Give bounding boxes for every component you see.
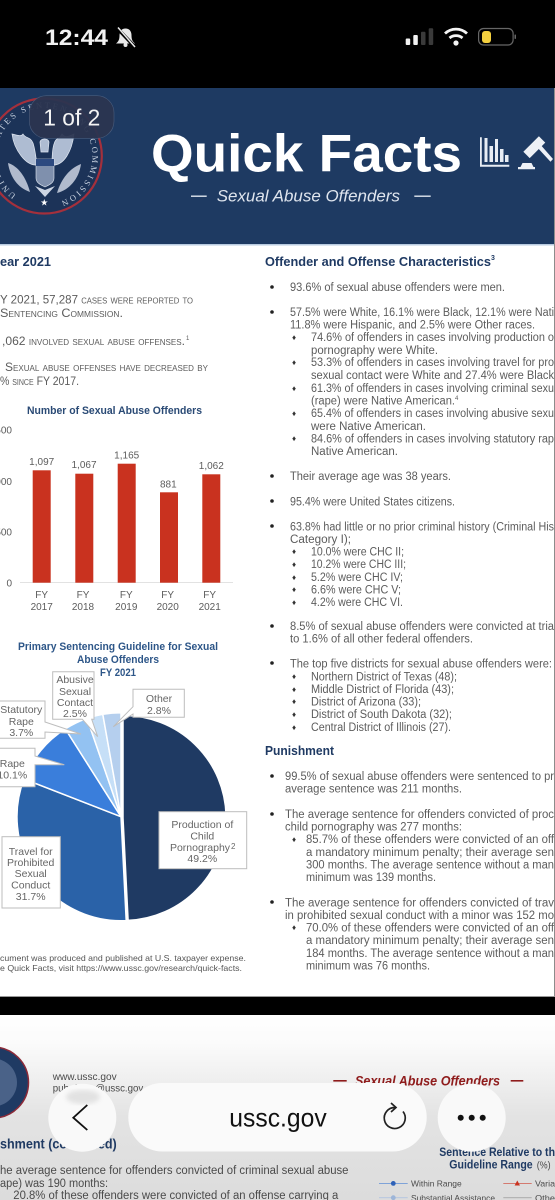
callout: travel (2, 837, 60, 908)
x axis labels: 2019 (115, 602, 138, 613)
text: characteristics list: District of South Dakota (32); (311, 709, 452, 721)
header band (0, 88, 554, 246)
text: case totals: Sexual abuse offenses have decreased by (5, 360, 209, 374)
text: characteristics list: 4 (455, 396, 459, 402)
text: characteristics list: to 1.6% of all other federal offenders. (290, 634, 473, 646)
panel: punishment (265, 743, 555, 972)
text: characteristics list: 6.6% were CHC V; (311, 584, 401, 596)
page counter pill (29, 96, 114, 138)
title: Quick Facts (151, 125, 462, 184)
text: continued punishment: he average sentence for offenders convicted of criminal sexual abuse (0, 1165, 348, 1177)
heading: Offender and Offense Characteristics (265, 254, 491, 269)
callout: abusive sexual contact (53, 672, 98, 737)
callout: statutory rape: Statutory (0, 704, 43, 716)
text: characteristics list: Central District of Illinois (27). (311, 722, 451, 734)
x axis labels: 2020 (157, 602, 179, 613)
callout: production: Pornography (170, 842, 231, 854)
diamond markers: ♦ (292, 358, 296, 367)
callout: production: Production of (171, 819, 233, 831)
callout: abusive sexual contact: Abusive (56, 674, 94, 686)
text: characteristics list: Native American. (311, 446, 398, 458)
x axis labels: FY (161, 590, 174, 601)
callout: travel: Prohibited (7, 857, 55, 869)
callout: other (113, 689, 184, 727)
diamond markers: ♦ (292, 672, 296, 681)
callout: abusive sexual contact: Contact (57, 697, 93, 709)
text: punishment list: minimum was 76 months. (306, 960, 430, 972)
text: case totals: Y 2021, 57,287 cases were reported to (0, 292, 193, 306)
diamond markers: ♦ (292, 409, 296, 418)
legend: Within Range (411, 1179, 462, 1189)
small seal (0, 1047, 28, 1118)
callout: statutory rape (0, 701, 81, 739)
diamond markers: ♦ (292, 333, 296, 342)
callout: other: 2.8% (147, 705, 171, 717)
text: characteristics list: 10.2% were CHC III; (311, 559, 406, 571)
panel: offender and offense characteristics (265, 254, 555, 734)
text: punishment list: minimum was 139 months. (306, 872, 436, 884)
icon: battery (479, 28, 516, 45)
diamond markers: ♦ (292, 598, 296, 607)
legend (379, 1179, 555, 1200)
second page subtitle: Sexual Abuse Offenders (355, 1072, 500, 1088)
heading: fiscal year: ear 2021 (0, 254, 51, 269)
callout: production: 49.2% (187, 853, 217, 865)
chart title: sentence relative to guideline: (%) (537, 1160, 551, 1172)
text: punishment list: child pornography was 277 months: (285, 822, 462, 834)
x axis labels: 2017 (31, 602, 53, 613)
diamond markers: ♦ (292, 547, 296, 556)
text: continued punishment: ape) was 190 months: (0, 1178, 108, 1190)
text: punishment list: The average sentence for offenders convicted of proc (285, 809, 554, 821)
diamond markers: ♦ (292, 723, 296, 732)
diamond markers: ♦ (292, 560, 296, 569)
text: characteristics list: Category I); (290, 534, 351, 546)
text: characteristics list: District of Arizona (33); (311, 696, 421, 708)
chart title (18, 641, 218, 679)
text: characteristics list: pornography were White. (311, 345, 438, 357)
bar values: 1,097 (29, 457, 55, 468)
contact text (52, 1071, 144, 1095)
pie slices (17, 713, 226, 921)
address pill: ussc.gov (229, 1103, 327, 1133)
heading: Punishment (265, 743, 335, 758)
text: characteristics list: Middle District of Florida (43); (311, 684, 454, 696)
diamond markers: ♦ (292, 573, 296, 582)
text: case totals (0, 292, 209, 388)
icon: reload (384, 1103, 405, 1128)
text: characteristics list: 5.2% were CHC IV; (311, 572, 403, 584)
footnote: cument was produced and published at U.S. taxpayer expense. (0, 953, 246, 963)
diamond markers: ♦ (292, 697, 296, 706)
text: characteristics list: 10.0% were CHC II; (311, 546, 404, 558)
panel: left column intro (0, 254, 209, 388)
callout: other: Other (146, 693, 173, 705)
more button (438, 1084, 506, 1152)
text: punishment list: average sentence was 211 months. (285, 784, 462, 796)
status time: 12:44 (45, 25, 109, 50)
text: punishment list: 70.0% of these offenders were convicted of an off (306, 922, 555, 934)
text: characteristics list (290, 282, 555, 734)
text: punishment list: 85.7% of these offenders were convicted of an off (306, 834, 555, 846)
footnote: e Quick Facts, visit https://www.ussc.gov/research/quick-facts. (0, 963, 242, 973)
heading: punishment continued: shment (continued) (0, 1135, 117, 1151)
chart title: Number of Sexual Abuse Offenders (27, 405, 202, 417)
diamond markers: ♦ (292, 384, 296, 393)
text: characteristics list: 93.6% of sexual abuse offenders were men. (290, 282, 505, 294)
eagle shield (36, 159, 54, 187)
callout: production (159, 812, 247, 869)
text: characteristics list: Northern District of Texas (48); (311, 672, 457, 684)
bar chart: number of offenders (0, 405, 233, 613)
x axis labels: FY (35, 590, 48, 601)
callout: rape: Rape (0, 758, 25, 770)
callout: abusive sexual contact: 2.5% (63, 708, 87, 720)
text: punishment list: The average sentence for offenders convicted of trav (285, 898, 554, 910)
x axis labels: FY (203, 590, 216, 601)
icon: wifi (445, 29, 467, 44)
callout: rape (0, 748, 64, 787)
bullet markers (270, 774, 274, 904)
eagle tail (35, 186, 55, 197)
callout: travel: Travel for (9, 846, 53, 858)
contact text: pubaffairs@ussc.gov (53, 1083, 144, 1095)
pie chart: primary sentencing guideline (0, 641, 247, 921)
callout: statutory rape: Rape (9, 716, 34, 728)
chart title: Abuse Offenders (77, 654, 159, 666)
text: punishment list: 300 months. The average sentence without a man (306, 860, 554, 872)
text: characteristics list: Their average age was 38 years. (290, 471, 451, 483)
y axis labels: 0 (6, 578, 12, 590)
text: characteristics list: 4.2% were CHC VI. (311, 597, 403, 609)
x axis labels (31, 590, 221, 613)
bar values: 1,062 (199, 461, 224, 472)
text: punishment list: a mandatory minimum penalty; their average sen (306, 847, 554, 859)
text: punishment list (285, 771, 555, 972)
chart title: Primary Sentencing Guideline for Sexual (18, 641, 218, 653)
page counter pill: 1 of 2 (43, 105, 100, 131)
text: case totals: ,062 involved sexual abuse offenses. (2, 334, 185, 348)
text: case totals: % since FY 2017. (0, 374, 79, 388)
olive branches (8, 163, 81, 193)
callout: travel: Sexual (15, 868, 47, 880)
diamond markers (292, 835, 296, 932)
second page preview (0, 1015, 555, 1200)
icon: silenced bell (116, 28, 135, 47)
address pill (128, 1083, 427, 1152)
y axis labels (0, 426, 12, 590)
text: punishment list: in prohibited sexual conduct with a minor was 152 mo (285, 910, 554, 922)
eagle wings (12, 134, 74, 165)
icon: signal bars (406, 28, 433, 45)
text: punishment list: 99.5% of sexual abuse offenders were sentenced to pr (285, 771, 554, 783)
icon: bar chart (480, 137, 509, 167)
x axis labels: FY (77, 590, 90, 601)
chart title: sentence relative to guideline (439, 1147, 555, 1172)
text: characteristics list: The top five districts for sexual abuse offenders were: (290, 658, 552, 670)
diamond markers (292, 333, 296, 732)
text: characteristics list: (rape) were Native American. (311, 396, 455, 408)
seal star: ★ (40, 198, 48, 208)
diamond markers: ♦ (292, 585, 296, 594)
callout: production: 2 (231, 842, 236, 851)
text: characteristics list: 11.8% were Hispanic, and 2.5% were Other races. (290, 320, 535, 332)
back button (48, 1084, 116, 1152)
icon: gavel (518, 136, 553, 169)
page gap divider (0, 996, 555, 1015)
legend: Varia (535, 1179, 555, 1189)
text: punishment list: 184 months. The average sentence without a man (306, 948, 554, 960)
text: case totals: Sentencing Commission. (0, 306, 123, 320)
callout: travel: Conduct (11, 880, 50, 892)
chart title: FY 2021 (100, 667, 136, 679)
browser toolbar (48, 1083, 506, 1152)
text: case totals: 1 (186, 336, 190, 342)
bullet markers (270, 285, 274, 665)
callout: statutory rape: 3.7% (9, 727, 33, 739)
x axis labels: FY (120, 590, 133, 601)
diamond markers: ♦ (292, 434, 296, 443)
diamond markers: ♦ (292, 923, 296, 932)
bar values: 881 (160, 480, 177, 490)
text: characteristics list: 95.4% were United States citizens. (290, 496, 455, 508)
contact text: www.ussc.gov (52, 1071, 117, 1083)
bar values: 1,165 (114, 450, 140, 462)
chart title: sentence relative to guideline: Guideline Range (449, 1160, 533, 1172)
diamond markers: ♦ (292, 835, 296, 844)
diamond markers: ♦ (292, 710, 296, 719)
heading: 3 (491, 255, 495, 262)
diamond markers: ♦ (292, 685, 296, 694)
footnote (0, 953, 246, 973)
bars (33, 464, 220, 583)
bar values (29, 450, 224, 490)
text: characteristics list: 8.5% of sexual abuse offenders were convicted at tria (290, 621, 555, 633)
text: continued punishment (0, 1165, 348, 1200)
text: punishment list: a mandatory minimum penalty; their average sen (306, 935, 554, 947)
phone status bar (0, 0, 555, 88)
bar values: 1,067 (71, 460, 97, 471)
x axis labels: 2021 (199, 602, 221, 613)
x axis labels: 2018 (72, 602, 95, 613)
callout: production: Child (190, 830, 214, 842)
text: characteristics list: were Native American. (310, 421, 426, 433)
callout: abusive sexual contact: Sexual (59, 686, 91, 698)
seal of the commission (0, 98, 103, 215)
callout: travel: 31.7% (16, 891, 46, 903)
subtitle: Sexual Abuse Offenders (217, 186, 400, 206)
